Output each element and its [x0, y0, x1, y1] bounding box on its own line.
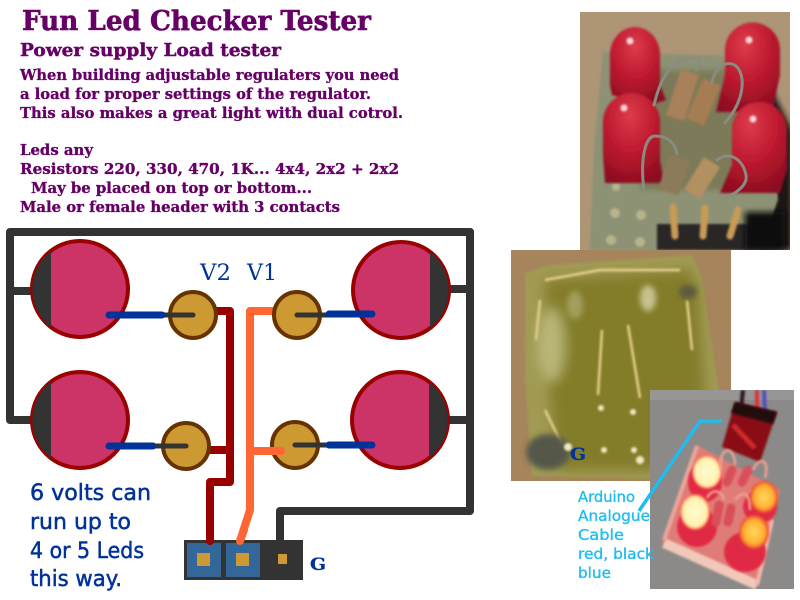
dark corner	[526, 434, 570, 470]
leads	[707, 451, 766, 510]
bright spots	[564, 405, 644, 464]
LED: top right	[353, 242, 449, 338]
resistor: top left	[109, 292, 216, 338]
note: 6 volts: this way.	[30, 567, 122, 592]
callout: Arduino cable: Arduino	[578, 488, 635, 506]
wire tips on header	[210, 530, 244, 541]
label: G: G	[310, 555, 326, 575]
bent resistor leads	[643, 58, 746, 198]
note: 6 volts: run up to	[30, 510, 131, 535]
resin highlights	[536, 270, 692, 445]
text block: purpose description	[19, 66, 403, 122]
glowing LEDs	[680, 455, 778, 549]
resistors	[716, 470, 748, 522]
LED: bottom right	[352, 372, 448, 468]
resistors	[668, 72, 712, 194]
LED highlights	[620, 36, 756, 122]
resistor: top right	[274, 292, 372, 338]
board holes	[606, 183, 646, 247]
note: 6 volts: 4 or 5 Leds	[30, 539, 144, 564]
photo: board coated in resin, underside	[511, 250, 731, 481]
resistor: bottom right	[272, 422, 372, 468]
callout: Arduino cable: blue	[578, 564, 611, 582]
text block: parts list: Leds any	[20, 141, 94, 159]
perfboard	[590, 52, 778, 250]
title: Fun Led Checker Tester	[22, 6, 372, 37]
ground wires	[10, 232, 470, 545]
callout: Arduino cable: Cable	[578, 526, 624, 544]
photo: LED board top view	[580, 12, 792, 250]
label: V2: V2	[199, 261, 231, 286]
connector	[722, 402, 777, 462]
label: V1: V1	[246, 261, 277, 286]
label: G: G	[570, 445, 586, 465]
V1 positive wire	[240, 311, 276, 541]
LED: top left	[32, 241, 128, 337]
text block: parts list	[20, 141, 399, 216]
text block: purpose description: When building adjustable regulaters you need	[19, 66, 399, 84]
callout: Arduino cable: Analogue	[578, 507, 650, 525]
callout: Arduino cable: red, black	[578, 545, 654, 563]
V2 positive wire	[207, 311, 230, 541]
LED bodies	[677, 462, 777, 572]
resin board	[525, 255, 722, 481]
text block: purpose description: a load for proper settings of the regulator.	[20, 85, 371, 103]
resistor: bottom left	[109, 423, 209, 469]
text block: parts list: Male or female header with 3 contacts	[20, 198, 340, 216]
note: 6 volts	[30, 481, 151, 592]
note: 6 volts: 6 volts can	[30, 481, 151, 506]
text block: parts list: Resistors 220, 330, 470, 1K... 4x4, 2x2 + 2x2	[20, 160, 399, 178]
perfboard	[662, 445, 780, 587]
red LEDs	[603, 22, 787, 193]
subtitle: Power supply Load tester	[20, 40, 282, 61]
text block: purpose description: This also makes a great light with dual cotrol.	[20, 104, 403, 122]
LED: bottom left	[32, 372, 128, 468]
photo: lit LEDs with cable	[650, 390, 794, 589]
circuit diagram	[10, 232, 470, 580]
cable wires	[741, 390, 765, 412]
shadow by board	[735, 90, 792, 250]
callout line to cable	[639, 421, 722, 511]
left perforated edge	[524, 275, 530, 470]
callout: Arduino cable	[578, 488, 654, 582]
3-pin header	[184, 540, 303, 580]
text block: parts list: May be placed on top or bottom...	[31, 179, 312, 197]
V1 branch to lower resistor	[250, 447, 281, 455]
header pins	[657, 207, 785, 250]
